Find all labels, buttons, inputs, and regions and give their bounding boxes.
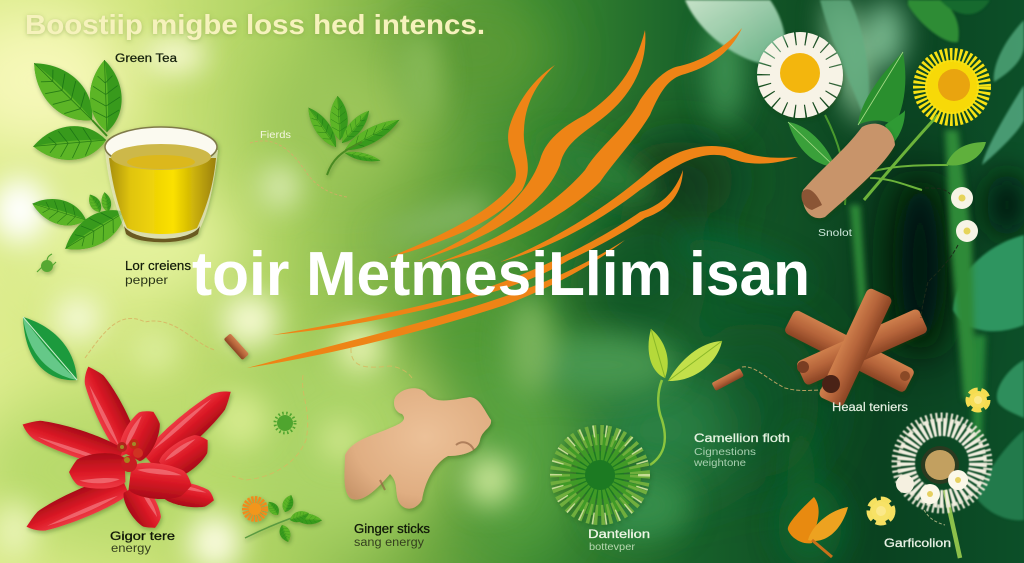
ginger label: Ginger sticks	[354, 522, 430, 536]
ginger root	[344, 388, 491, 509]
garficolion label: Garficolion	[884, 536, 951, 550]
main title: toir MetmesiLlim isan	[192, 240, 810, 309]
small cinnamon stick	[224, 333, 249, 360]
pepper label	[125, 259, 191, 287]
tea leaves	[22, 50, 133, 261]
glass of green tea	[105, 127, 218, 242]
ginger label	[354, 522, 430, 549]
camellion label: Camellion floth	[694, 431, 790, 445]
red chili peppers	[18, 360, 240, 540]
camellion label: Cignestions	[694, 446, 756, 458]
spiky green herb	[556, 431, 644, 519]
cinnamon sticks crossed	[783, 287, 928, 407]
dandelion puff	[896, 417, 988, 558]
large background leaves at right	[685, 0, 1024, 520]
snolot label: Snolot	[818, 228, 852, 239]
small cinnamon and dashed link	[712, 367, 822, 391]
yellow dandelion flower	[920, 55, 984, 119]
marigold and herb	[245, 493, 322, 544]
orange energy flames	[247, 28, 798, 368]
ginger label: sang energy	[354, 537, 424, 549]
heal label: Heaal teniers	[832, 402, 908, 414]
small yellow flower lower	[869, 499, 893, 523]
green tea label: Green Tea	[115, 53, 178, 65]
spiky green seed	[275, 413, 295, 433]
daisy flower	[768, 43, 832, 107]
pepper label bottom: Gigor tere	[110, 529, 175, 543]
pepper label: Lor creiens	[125, 259, 191, 273]
orange autumn leaf	[788, 497, 848, 557]
top heading: Boostiip migbe loss hed intencs.	[25, 9, 485, 40]
dandelion label	[588, 527, 650, 553]
camellion label: weightone	[693, 457, 746, 469]
camellion label	[693, 431, 790, 469]
small yellow flower	[968, 390, 988, 410]
dandelion label: bottevper	[589, 541, 636, 553]
dashed links near blossoms	[921, 188, 958, 318]
right plant stems and leaves	[788, 52, 986, 205]
dandelion label: Dantelion	[588, 527, 650, 541]
small green bug icon	[37, 254, 56, 272]
dashed connector: leaf to cinnamon	[85, 318, 215, 358]
single bright leaf	[23, 317, 77, 380]
fields label: Fierds	[260, 130, 291, 141]
herb sprig	[302, 96, 403, 175]
dashed link near dandelion	[924, 510, 945, 525]
green tea illustration	[22, 50, 218, 261]
seedling	[649, 329, 722, 465]
dashed connector: herbs	[250, 141, 347, 197]
pepper label: pepper	[125, 273, 168, 287]
pepper label bottom	[110, 529, 175, 555]
small white blossoms	[951, 187, 978, 242]
cinnamon tube	[801, 124, 895, 218]
dashed connectors: pepper and ginger	[232, 348, 412, 480]
pepper label bottom: energy	[111, 543, 151, 555]
